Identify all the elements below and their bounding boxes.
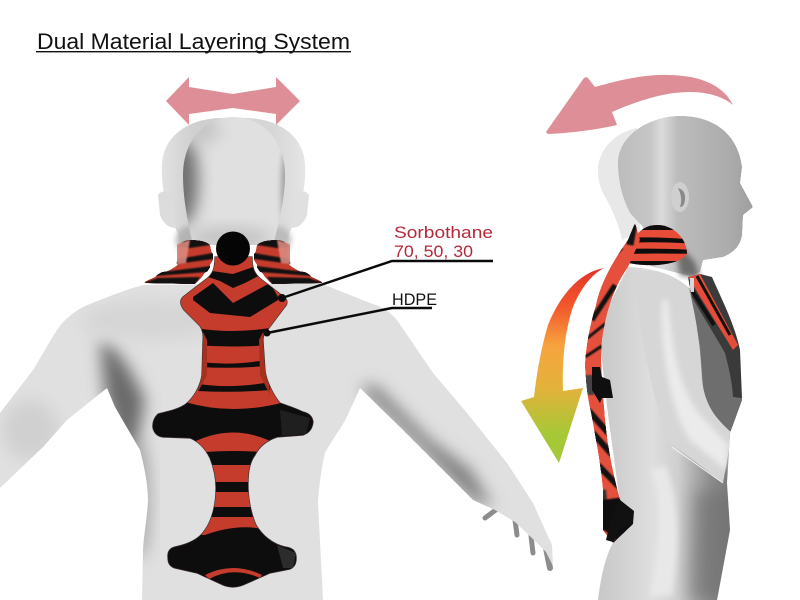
black chevron bands — [150, 264, 320, 590]
side lower clip — [606, 500, 634, 542]
leader line to Sorbothane — [278, 261, 493, 302]
title: Dual Material Layering System — [37, 29, 350, 54]
chest shadow — [690, 290, 745, 436]
head: back — [183, 117, 285, 244]
body: back — [0, 270, 580, 600]
collar wing: right — [254, 240, 324, 284]
side view figure — [580, 116, 753, 600]
side collar — [630, 225, 687, 266]
label: HDPE: HDPE — [392, 290, 437, 309]
head: side — [618, 116, 753, 276]
label: Sorbothane 70, 50, 30: 70, 50, 30 — [394, 242, 473, 261]
rear view figure — [0, 110, 580, 600]
side mid clip — [592, 367, 613, 403]
fingers — [485, 509, 550, 568]
ghost head: swayed right — [227, 118, 309, 254]
ghost head: side — [598, 128, 640, 240]
neck shadow — [675, 240, 700, 278]
side spine plate — [585, 224, 640, 542]
neck knob — [216, 232, 250, 266]
back brace plate: red Sorbothane and black HDPE bands — [150, 232, 320, 590]
collar wing: left — [143, 240, 213, 284]
chest strap — [688, 274, 742, 398]
gradient load-transfer arrow — [521, 268, 604, 463]
ghost head: swayed left — [158, 118, 240, 254]
leader line to HDPE — [264, 308, 432, 336]
ear — [671, 182, 689, 212]
left-right movement arrow — [166, 77, 300, 125]
label: Sorbothane 70, 50, 30 — [394, 223, 493, 261]
arm — [678, 280, 730, 482]
forward movement arrow — [546, 75, 733, 134]
torso: side — [598, 267, 742, 600]
label: Sorbothane 70, 50, 30: Sorbothane — [394, 223, 493, 242]
